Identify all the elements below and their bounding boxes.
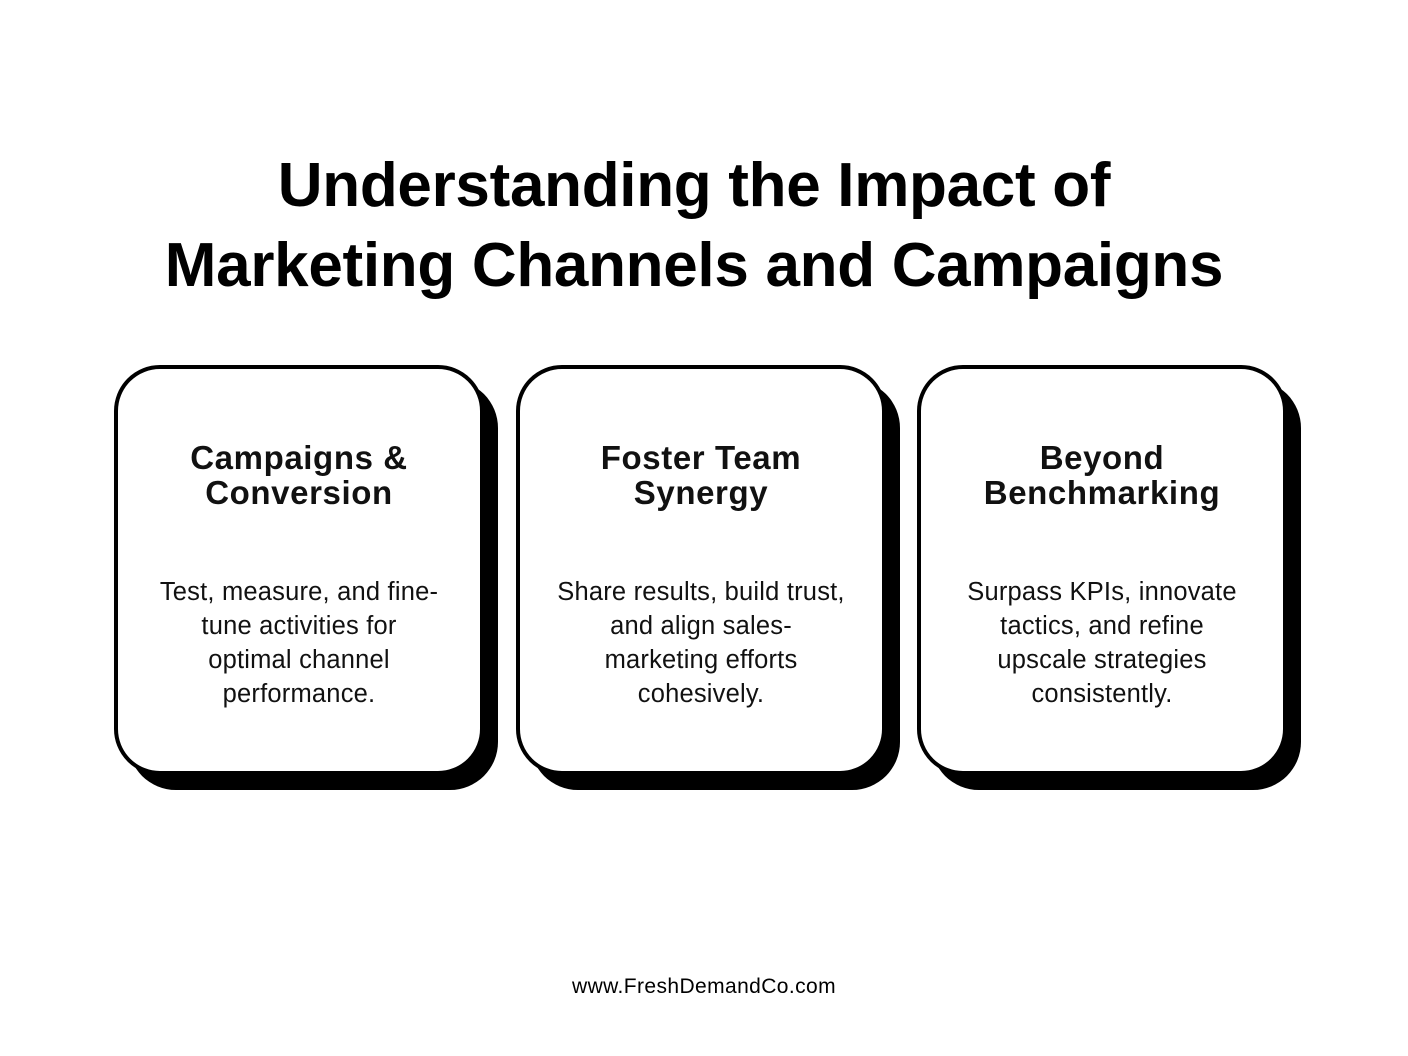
heading: campaigns: Campaigns & bbox=[190, 439, 408, 476]
heading: campaigns: Conversion bbox=[205, 474, 393, 511]
heading: benchmarking bbox=[984, 439, 1220, 511]
text: synergy: marketing efforts bbox=[605, 646, 797, 674]
title: Marketing Channels and Campaigns bbox=[165, 231, 1223, 300]
text: synergy: cohesively. bbox=[638, 680, 764, 708]
text: benchmarking: upscale strategies bbox=[997, 646, 1207, 674]
heading: synergy bbox=[601, 439, 801, 511]
text: campaigns: Test, measure, and fine- bbox=[160, 578, 438, 606]
heading: benchmarking: Benchmarking bbox=[984, 474, 1220, 511]
text: campaigns: performance. bbox=[223, 680, 375, 708]
panel: foster team synergy bbox=[516, 365, 900, 790]
panel: campaigns & conversion bbox=[114, 365, 498, 790]
text: campaigns bbox=[160, 578, 438, 708]
heading: synergy: Foster Team bbox=[601, 439, 801, 476]
text: synergy: and align sales- bbox=[610, 612, 792, 640]
text: synergy bbox=[557, 578, 845, 708]
title: Understanding the Impact of bbox=[278, 151, 1110, 220]
text: benchmarking bbox=[967, 578, 1237, 708]
footer: www.FreshDemandCo.com bbox=[572, 975, 836, 998]
text: benchmarking: tactics, and refine bbox=[1000, 612, 1204, 640]
text: benchmarking: consistently. bbox=[1031, 680, 1173, 708]
heading: synergy: Synergy bbox=[634, 474, 768, 511]
text: benchmarking: Surpass KPIs, innovate bbox=[967, 578, 1237, 606]
text: campaigns: tune activities for bbox=[201, 612, 397, 640]
panel: beyond benchmarking bbox=[917, 365, 1301, 790]
text: synergy: Share results, build trust, bbox=[557, 578, 845, 606]
text: campaigns: optimal channel bbox=[208, 646, 390, 674]
heading: benchmarking: Beyond bbox=[1040, 439, 1164, 476]
title bbox=[165, 151, 1223, 300]
heading: campaigns bbox=[190, 439, 408, 511]
